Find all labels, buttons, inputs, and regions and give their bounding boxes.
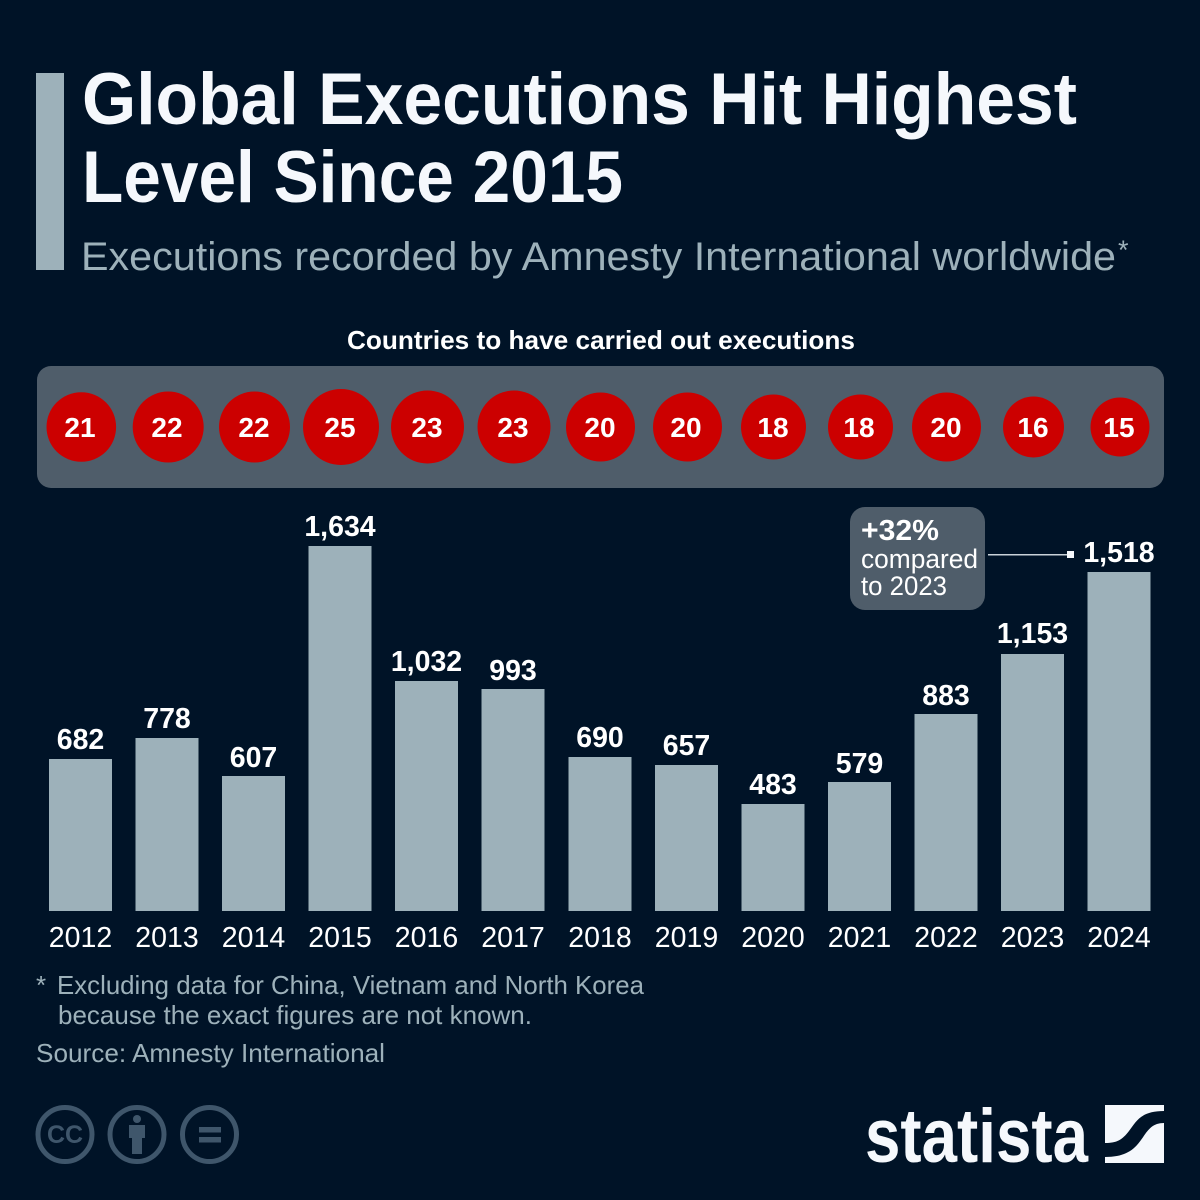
bar 2012: 2012 bbox=[49, 922, 112, 954]
bar 2021: 2021 bbox=[828, 922, 891, 954]
bar 2015 bbox=[304, 511, 376, 954]
bar 2022 bbox=[914, 680, 978, 954]
bubble 2020 bbox=[741, 394, 806, 460]
bar 2024: 2024 bbox=[1087, 922, 1151, 954]
bubble 2015: 25 bbox=[324, 412, 356, 443]
bar 2013 bbox=[135, 703, 199, 954]
bar 2020: 2020 bbox=[741, 922, 805, 954]
bar 2016 bbox=[391, 646, 462, 954]
panel: countries per year bbox=[37, 366, 1164, 488]
bar 2019: 657 bbox=[663, 730, 710, 762]
bubble 2019 bbox=[653, 392, 722, 462]
icon: cc bbox=[38, 1108, 92, 1162]
bar 2020: 483 bbox=[749, 769, 797, 801]
bubble 2018: 20 bbox=[584, 412, 616, 443]
callout: +32% compared to 2023: to 2023 bbox=[861, 571, 947, 601]
title accent bar bbox=[36, 73, 64, 270]
callout: +32% compared to 2023: +32% bbox=[861, 515, 939, 547]
bubble 2024: 15 bbox=[1103, 412, 1135, 443]
bar 2022: 2022 bbox=[914, 922, 978, 954]
title: Global Executions Hit Highest bbox=[82, 59, 1077, 140]
bar 2016: 1,032 bbox=[391, 646, 462, 678]
bar 2013: 778 bbox=[143, 703, 191, 735]
statista logo mark bbox=[1105, 1105, 1164, 1163]
bubble 2022 bbox=[912, 392, 981, 462]
footnote: * bbox=[36, 970, 46, 1000]
bubble 2014: 22 bbox=[238, 412, 270, 443]
bubble 2017: 23 bbox=[497, 412, 529, 443]
bar 2022: 883 bbox=[922, 680, 970, 712]
bubble 2018 bbox=[566, 392, 635, 462]
bar 2014 bbox=[222, 742, 285, 954]
bar 2019: 2019 bbox=[655, 922, 718, 954]
bar 2018: 690 bbox=[576, 722, 624, 754]
bar 2018 bbox=[568, 722, 632, 954]
bar 2013: 2013 bbox=[135, 922, 199, 954]
subtitle: Executions recorded by Amnesty International worldwide bbox=[81, 235, 1116, 279]
title: Level Since 2015 bbox=[82, 137, 623, 218]
subtitle: * bbox=[1118, 235, 1129, 265]
statista wordmark: statista bbox=[865, 1094, 1089, 1179]
icon: creative commons licence bbox=[38, 1108, 236, 1162]
bubble 2013 bbox=[133, 392, 204, 462]
bubble 2021: 18 bbox=[843, 412, 875, 443]
bar 2020 bbox=[741, 769, 805, 954]
bubble 2012 bbox=[47, 392, 116, 462]
bar 2017: 993 bbox=[489, 655, 537, 687]
bar 2019 bbox=[655, 730, 718, 954]
bar 2016: 2016 bbox=[395, 922, 458, 954]
bubble 2014 bbox=[219, 392, 290, 462]
footnote: Excluding data for China, Vietnam and North Korea bbox=[57, 970, 645, 1000]
bar 2023: 1,153 bbox=[997, 618, 1068, 650]
bar 2015: 2015 bbox=[308, 922, 372, 954]
callout connector arrow bbox=[988, 551, 1074, 558]
bar chart: executions per year bbox=[49, 511, 1155, 954]
bubble 2012: 21 bbox=[64, 412, 96, 443]
bubble 2023 bbox=[1003, 396, 1064, 458]
icon: attribution bbox=[110, 1108, 164, 1162]
bar 2015: 1,634 bbox=[304, 511, 376, 543]
footnote bbox=[36, 970, 645, 1030]
callout: +32% compared to 2023 bbox=[850, 507, 985, 610]
bar 2024 bbox=[1083, 537, 1155, 954]
bar 2017 bbox=[481, 655, 545, 954]
bar 2021: 579 bbox=[836, 748, 883, 780]
bar 2018: 2018 bbox=[568, 922, 632, 954]
bar 2024: 1,518 bbox=[1083, 537, 1155, 569]
bar 2014: 2014 bbox=[222, 922, 285, 954]
bar 2023: 2023 bbox=[1001, 922, 1064, 954]
bubble 2021 bbox=[828, 394, 893, 460]
bar 2023 bbox=[997, 618, 1068, 954]
bubble 2020: 18 bbox=[757, 412, 789, 443]
icon: no derivatives bbox=[182, 1108, 236, 1162]
bubble 2015 bbox=[303, 389, 379, 465]
bar 2012: 682 bbox=[57, 724, 104, 756]
statista logo bbox=[865, 1094, 1164, 1179]
heading: countries to have carried out executions: Countries to have carried out executions bbox=[347, 325, 855, 355]
bubble 2016: 23 bbox=[411, 412, 443, 443]
icon: cc: CC bbox=[47, 1121, 83, 1149]
bubble 2022: 20 bbox=[930, 412, 962, 443]
bubble 2019: 20 bbox=[670, 412, 702, 443]
source: Source: Amnesty International bbox=[36, 1038, 385, 1068]
bubble 2024 bbox=[1090, 398, 1150, 456]
title bbox=[82, 59, 1077, 218]
bar 2017: 2017 bbox=[481, 922, 545, 954]
footnote: because the exact figures are not known. bbox=[58, 1000, 532, 1030]
callout: +32% compared to 2023: compared bbox=[861, 544, 978, 574]
bar 2021 bbox=[828, 748, 891, 954]
bubble 2016 bbox=[391, 390, 464, 464]
bar 2012 bbox=[49, 724, 112, 954]
bar 2014: 607 bbox=[230, 742, 277, 774]
bubble 2017 bbox=[478, 390, 550, 464]
bubble 2023: 16 bbox=[1017, 412, 1049, 443]
bubble 2013: 22 bbox=[151, 412, 183, 443]
